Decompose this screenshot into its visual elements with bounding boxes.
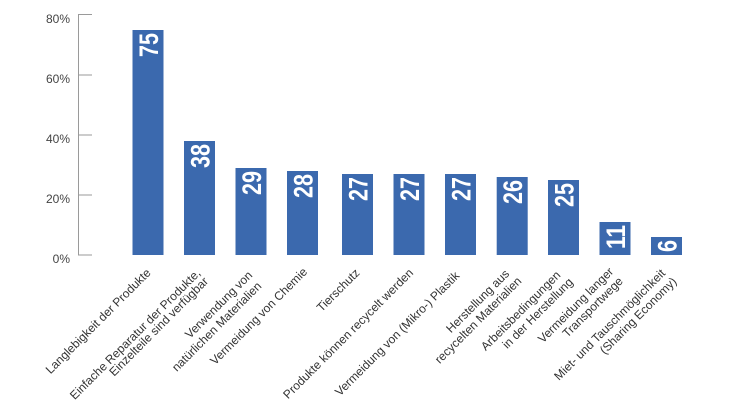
category labels: Arbeitsbedingungen — [478, 268, 563, 353]
bar values: 25 — [550, 183, 580, 207]
bar values: 26 — [498, 180, 528, 204]
category labels: Verwendung von — [182, 268, 255, 341]
category labels: Vermeidung langer — [535, 265, 616, 346]
y axis labels: 60% — [46, 72, 70, 86]
bar values: 27 — [344, 177, 374, 201]
bar values — [134, 33, 682, 252]
y axis labels: 20% — [46, 192, 70, 206]
bar values: 6 — [652, 240, 682, 252]
y axis labels: 0% — [53, 252, 70, 266]
category labels: natürlichen Materialien — [169, 279, 264, 374]
category labels: Transportwege — [560, 274, 626, 340]
bar values: 11 — [601, 225, 631, 249]
category labels: Einfache Reparatur der Produkte, — [67, 266, 203, 402]
y axis with ticks — [78, 14, 92, 255]
category labels: (Sharing Economy) — [597, 274, 679, 357]
bar values: 28 — [288, 174, 318, 198]
category labels: Herstellung aus — [443, 267, 512, 336]
category labels: in der Herstellung — [499, 275, 576, 351]
bar values: 29 — [237, 171, 267, 195]
y axis labels: 80% — [46, 12, 70, 26]
bars — [132, 30, 682, 255]
bar values: 38 — [186, 144, 216, 168]
category labels — [43, 265, 679, 402]
category labels: Miet- und Tauschmöglichkeit — [551, 266, 669, 383]
bar values: 75 — [134, 33, 164, 57]
category labels: recycelten Materialien — [432, 274, 524, 366]
bar values: 27 — [395, 177, 425, 201]
y axis labels: 40% — [46, 132, 70, 146]
bar values: 27 — [446, 177, 476, 201]
category labels: Produkte können recycelt werden — [280, 266, 416, 402]
y axis labels — [46, 12, 70, 266]
category labels: Tierschutz — [314, 266, 363, 315]
category labels: Langlebigkeit der Produkte — [43, 266, 154, 377]
category labels: Vermeidung von Chemie — [207, 265, 310, 368]
category labels: Einzelteile sind verfügbar — [106, 274, 211, 379]
category labels: Vermeidung von (Mikro-) Plastik — [332, 268, 463, 399]
